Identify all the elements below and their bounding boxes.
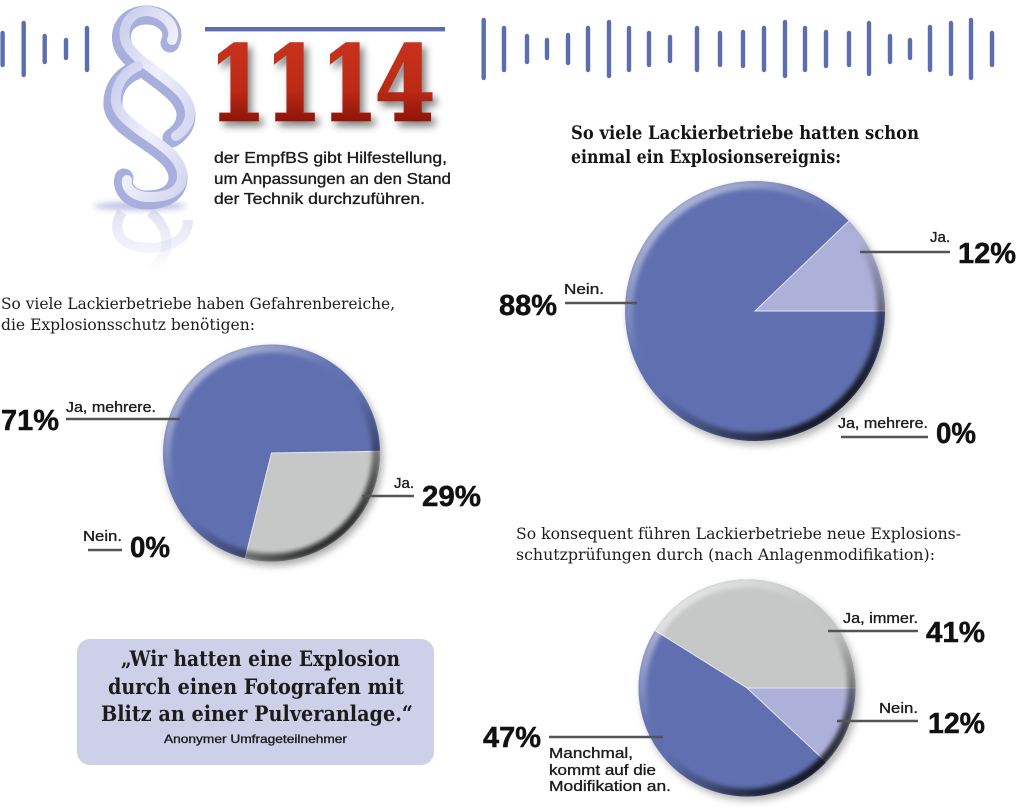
- big number 1114: 1: [321, 24, 378, 145]
- labels: Gefahrenbereiche: 0%: [130, 532, 170, 564]
- labels: Gefahrenbereiche: Ja.: [394, 475, 414, 492]
- heading: Gefahrenbereiche: die Explosionsschutz benötigen:: [1, 315, 255, 334]
- heading: Explosionsereignis: [571, 123, 919, 168]
- labels: Explosionsereignis: 88%: [499, 290, 557, 322]
- big number 1114: 1: [265, 24, 322, 145]
- labels: Prüfungen: Nein.: [879, 700, 918, 717]
- labels: Gefahrenbereiche: Ja, mehrere.: [66, 399, 156, 416]
- callout: quote: [77, 639, 434, 765]
- big number 1114: 4: [375, 24, 435, 145]
- labels: Gefahrenbereiche: 71%: [1, 405, 59, 437]
- labels: Prüfungen: 41%: [926, 617, 985, 649]
- pie chart: Explosionsereignis: [625, 172, 900, 445]
- labels: Prüfungen: [483, 610, 985, 795]
- intro text: der Technik durchzuführen.: [214, 191, 425, 208]
- labels: Gefahrenbereiche: [1, 399, 481, 564]
- heading: Prüfungen: schutzprüfungen durch (nach Anlagenmodifikation):: [516, 545, 935, 564]
- heading: Gefahrenbereiche: [1, 294, 395, 334]
- callout: quote: „Wir hatten eine Explosion: [121, 647, 400, 672]
- labels: Explosionsereignis: Nein.: [564, 281, 604, 298]
- decorative bars right: [484, 20, 992, 78]
- heading: Explosionsereignis: einmal ein Explosionsereignis:: [571, 147, 841, 168]
- heading: Explosionsereignis: So viele Lackierbetriebe hatten schon: [571, 123, 919, 144]
- labels: Prüfungen: Modifikation an.: [549, 778, 671, 795]
- labels: Prüfungen: Manchmal,: [549, 745, 633, 762]
- icon: paragraph symbol: [94, 11, 190, 270]
- heading: Prüfungen: So konsequent führen Lackierbetriebe neue Explosions-: [516, 524, 961, 543]
- pie chart: Prüfungen: [637, 579, 863, 805]
- intro text: um Anpassungen an den Stand: [214, 171, 451, 188]
- heading: Gefahrenbereiche: So viele Lackierbetriebe haben Gefahrenbereiche,: [1, 294, 395, 313]
- labels: Explosionsereignis: 0%: [936, 418, 976, 450]
- intro text: der EmpfBS gibt Hilfestellung,: [214, 150, 447, 167]
- labels: Explosionsereignis: [499, 229, 1016, 450]
- decorative bars left: [3, 23, 87, 75]
- big number 1114: 1: [325, 29, 382, 150]
- big number 1114: [209, 24, 439, 150]
- intro text: [214, 150, 451, 208]
- labels: Gefahrenbereiche: 29%: [422, 481, 481, 513]
- labels: Explosionsereignis: Ja, mehrere.: [838, 415, 928, 432]
- callout: quote: Anonymer Umfrageteilnehmer: [164, 732, 347, 746]
- big number 1114: 1: [213, 29, 270, 150]
- callout: quote: Blitz an einer Pulveranlage.“: [101, 702, 413, 727]
- labels: Prüfungen: Ja, immer.: [843, 610, 918, 627]
- big number 1114: 4: [379, 29, 439, 150]
- callout: quote: durch einen Fotografen mit: [108, 675, 404, 700]
- labels: Prüfungen: 12%: [928, 708, 985, 740]
- icon: paragraph reflection: [117, 212, 188, 270]
- labels: Explosionsereignis: 12%: [958, 238, 1016, 270]
- labels: Gefahrenbereiche: Nein.: [83, 528, 122, 545]
- big number 1114: 1: [209, 24, 266, 145]
- heading: Prüfungen: [516, 524, 961, 564]
- labels: Prüfungen: 47%: [483, 722, 541, 754]
- pie chart: Gefahrenbereiche: [160, 344, 388, 570]
- big number 1114: 1: [269, 29, 326, 150]
- labels: Prüfungen: kommt auf die: [549, 762, 656, 779]
- top rule: [205, 27, 445, 31]
- labels: Explosionsereignis: Ja.: [930, 229, 950, 246]
